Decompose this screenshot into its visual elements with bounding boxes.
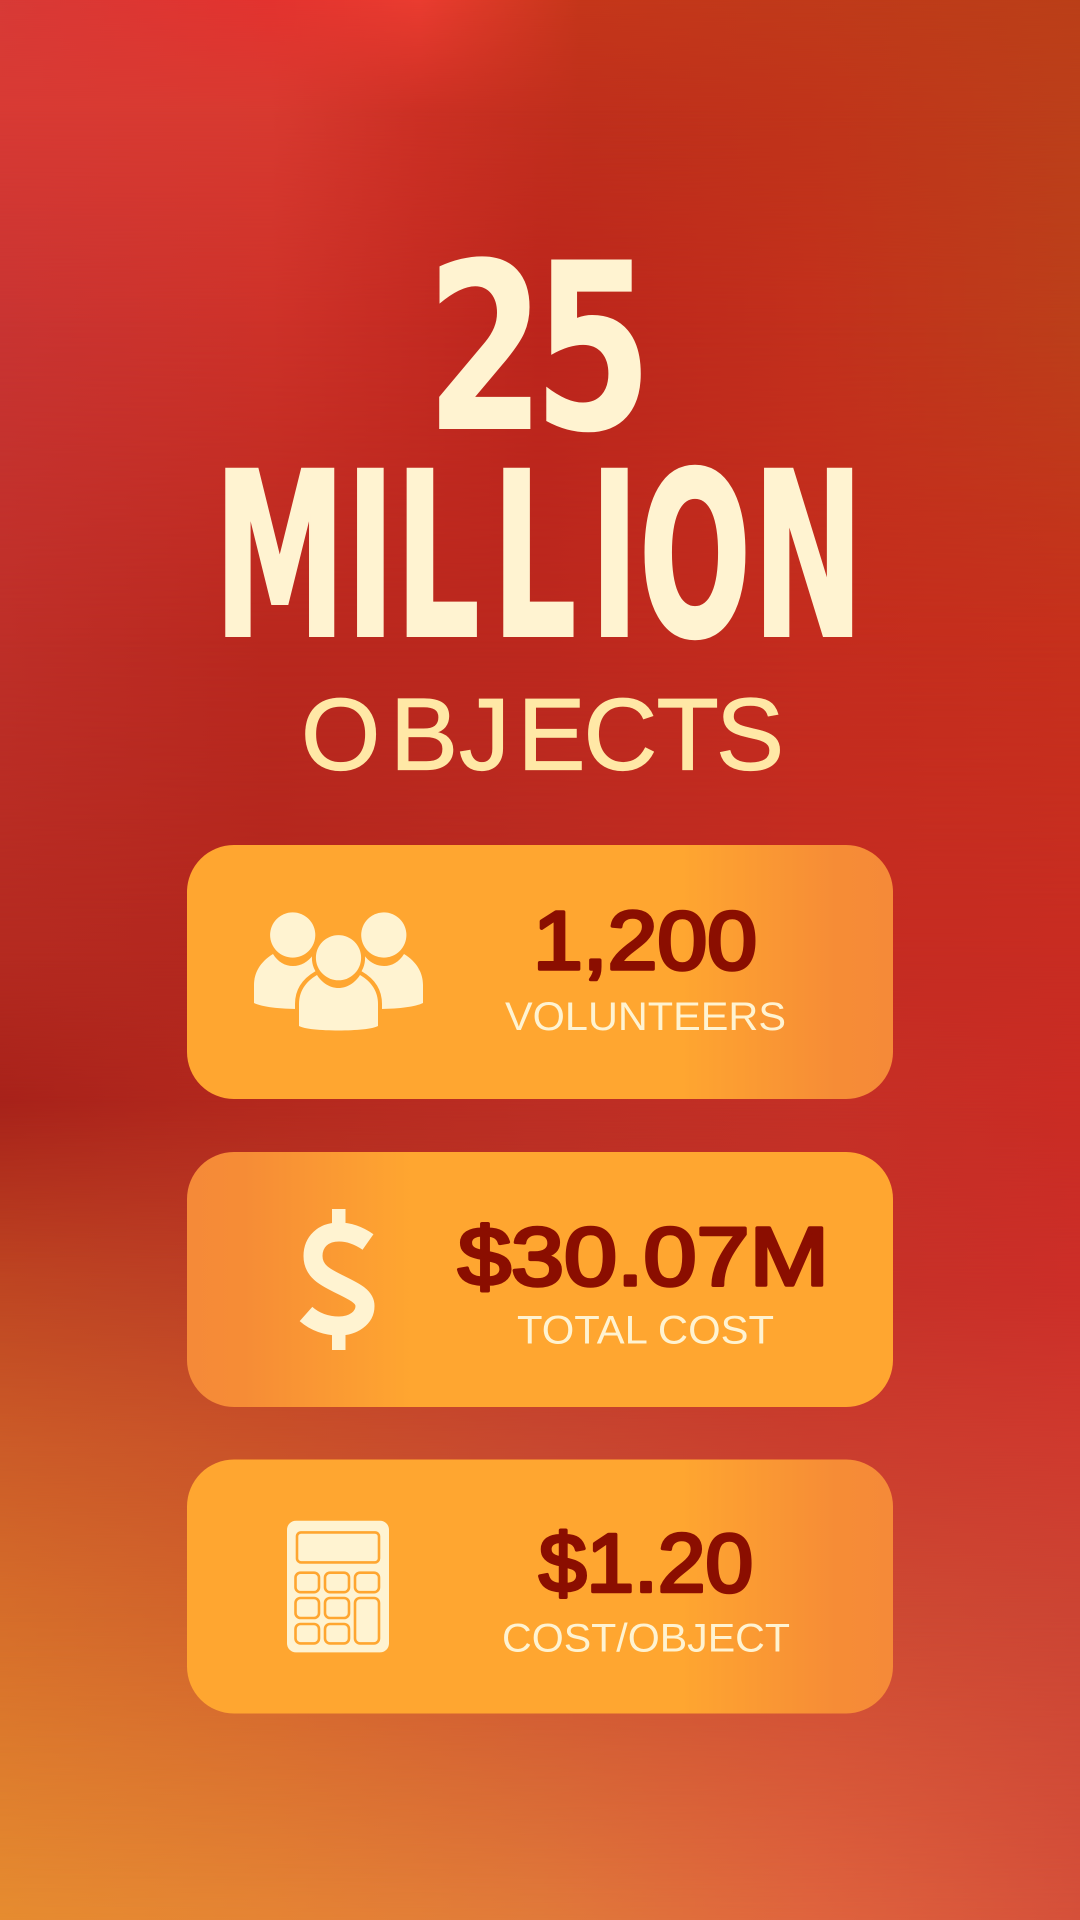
title: 25 million objects (214, 214, 863, 791)
label: cost per object: COST/OBJECT (502, 1617, 790, 1661)
panel: volunteers (187, 845, 893, 1099)
icon: calculator (287, 1521, 389, 1652)
value: 1,200: 1,200 (533, 894, 757, 987)
card background (187, 1152, 893, 1407)
icon: dollar sign (306, 1209, 368, 1350)
label: total cost: TOTAL COST (517, 1308, 774, 1352)
panel: cost per object (187, 1460, 893, 1714)
subtitle: OBJECTS: OBJECTS (301, 678, 784, 792)
value: $1.20: $1.20 (539, 1516, 753, 1610)
value: $30.07M: $30.07M (458, 1210, 829, 1303)
label: volunteers: VOLUNTEERS (505, 995, 786, 1039)
title number: 25: 25 (426, 214, 653, 485)
panel: total cost (187, 1152, 893, 1407)
card background (187, 845, 893, 1099)
icon: group of people (254, 912, 423, 1030)
title word: MILLION: MILLION (214, 424, 863, 689)
card background (187, 1460, 893, 1714)
